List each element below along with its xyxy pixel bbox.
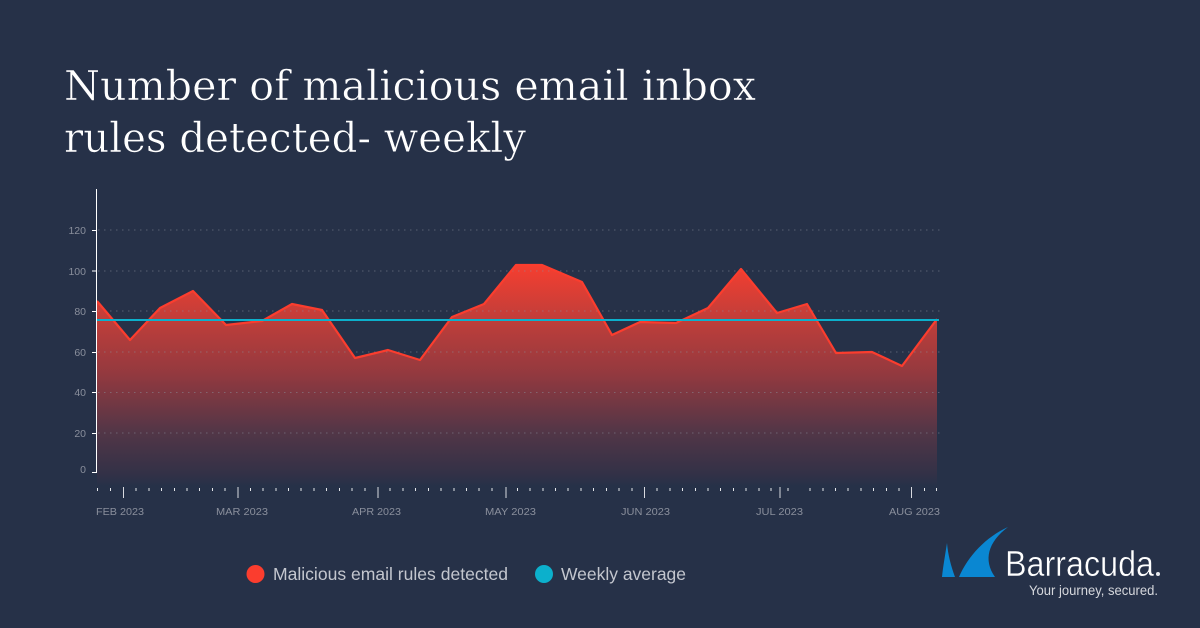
x axis labels: AUG 2023	[889, 506, 940, 518]
y axis labels: 0	[80, 464, 86, 476]
y axis labels	[68, 225, 86, 476]
line: weekly average	[97, 319, 939, 321]
x axis labels: JUL 2023	[756, 506, 803, 518]
x axis labels	[96, 506, 940, 518]
x axis labels: MAY 2023	[485, 506, 536, 518]
title	[64, 62, 756, 162]
x axis labels: JUN 2023	[621, 506, 670, 518]
x axis labels: MAR 2023	[216, 506, 268, 518]
x axis minor ticks	[98, 488, 936, 491]
icon: shark fins	[942, 527, 1008, 577]
y axis	[92, 189, 97, 472]
legend item: weekly average: Weekly average	[561, 564, 686, 584]
legend item: malicious email rules detected: Malicious email rules detected	[273, 564, 508, 584]
x axis labels: APR 2023	[352, 506, 401, 518]
x axis labels: FEB 2023	[96, 506, 144, 518]
legend	[246, 564, 686, 584]
title: Number of malicious email inbox	[64, 62, 756, 110]
gridlines	[98, 230, 940, 433]
logo: Barracuda	[942, 527, 1160, 598]
area: malicious email rules detected	[97, 265, 937, 486]
y axis labels: 100	[68, 266, 86, 278]
title: rules detected- weekly	[64, 114, 527, 162]
line: malicious email rules detected	[97, 265, 937, 366]
y axis labels: 60	[74, 347, 86, 359]
chart	[68, 189, 940, 518]
registered mark	[1156, 572, 1160, 576]
wordmark: Barracuda	[1005, 543, 1155, 584]
x axis major ticks	[124, 487, 912, 498]
y axis labels: 120	[68, 225, 86, 237]
y axis labels: 20	[74, 428, 86, 440]
y axis labels: 40	[74, 387, 86, 399]
tagline: Your journey, secured.	[1029, 583, 1158, 598]
y axis labels: 80	[74, 306, 86, 318]
